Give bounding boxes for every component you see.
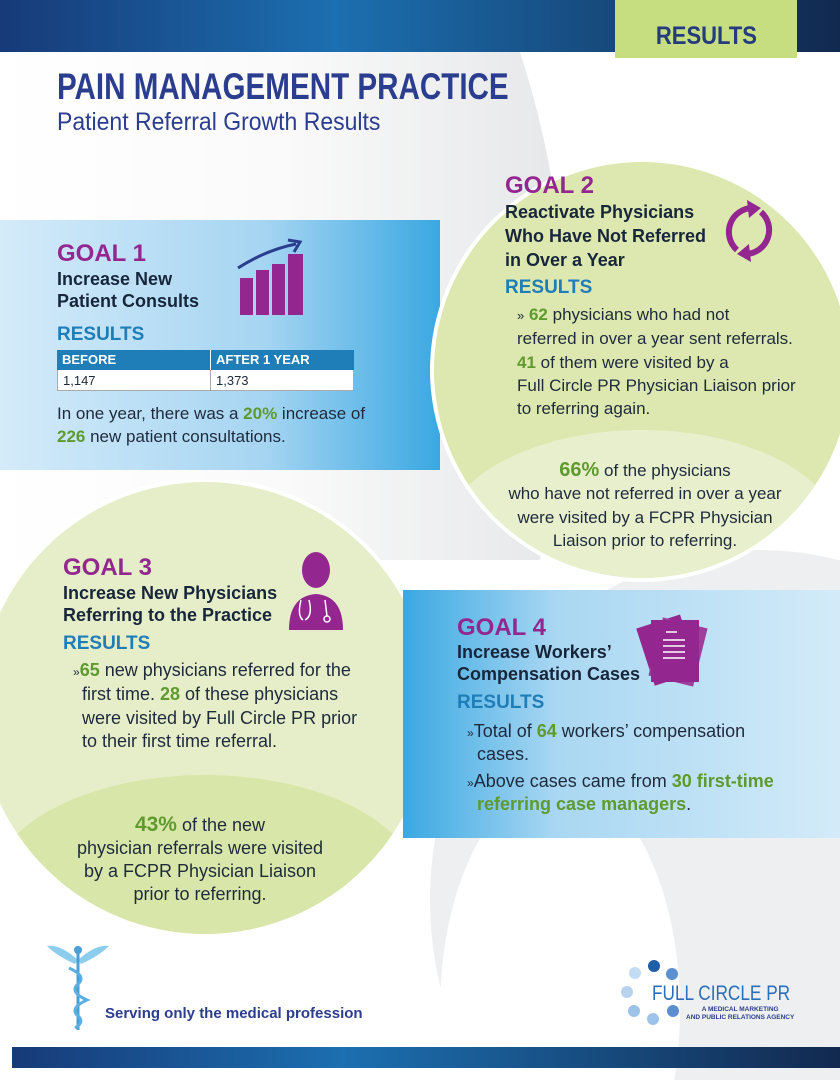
table: 1,147 — [63, 373, 96, 388]
panel: goal 2 circle — [430, 162, 840, 582]
goal 4 heading: Compensation Cases — [457, 664, 640, 684]
goal 3 heading: Increase New Physicians — [63, 583, 277, 603]
goal 3 heading: Referring to the Practice — [63, 605, 272, 625]
table: AFTER 1 YEAR — [216, 352, 310, 367]
table — [57, 350, 354, 391]
icon: documents — [636, 614, 708, 687]
goal 1 heading: Increase New — [57, 269, 172, 289]
goal 2 bullet: to referring again. — [517, 399, 650, 418]
goal 2 bullet — [517, 305, 796, 418]
goal 3 bullet: first time. 28 of these physicians — [82, 684, 338, 704]
panel: goal 1 — [0, 220, 440, 470]
goal 2 stat: were visited by a FCPR Physician — [517, 508, 773, 527]
goal 2 bullet: 41 of them were visited by a — [517, 353, 729, 372]
goal 3 bullet: were visited by Full Circle PR prior — [82, 708, 357, 728]
results tab: RESULTS — [655, 22, 757, 50]
icon: caduceus — [47, 946, 109, 1030]
goal 2 stat: 66% of the physicians — [559, 459, 731, 481]
goal 4 bullets: »Above cases came from 30 first-time — [467, 771, 774, 791]
goal 1 heading — [57, 269, 199, 311]
results label: RESULTS — [505, 277, 592, 298]
logo: full circle pr: FULL CIRCLE PR — [652, 982, 790, 1005]
icon: circular arrows — [726, 200, 772, 262]
goal 2 label: GOAL 2 — [505, 172, 594, 199]
logo: full circle pr: A MEDICAL MARKETING — [702, 1006, 779, 1013]
goal 2 bullet: Full Circle PR Physician Liaison prior — [517, 376, 796, 395]
table: BEFORE — [62, 352, 116, 367]
goal 2 bullet: referred in over a year sent referrals. — [517, 329, 793, 348]
goal 2 stat: Liaison prior to referring. — [553, 531, 737, 550]
goal 4 bullets: cases. — [477, 744, 529, 764]
goal 4 bullets — [467, 721, 774, 814]
icon: doctor — [289, 552, 343, 630]
goal 1 heading: Patient Consults — [57, 291, 199, 311]
goal 2 content — [505, 172, 796, 550]
goal 3 stat: by a FCPR Physician Liaison — [84, 861, 316, 881]
results tab — [615, 0, 797, 58]
goal 1 summary: In one year, there was a 20% increase of 226 new patient consultations. — [57, 404, 365, 446]
goal 3 bullet: »65 new physicians referred for the — [73, 660, 351, 680]
panel: goal 4 — [403, 590, 840, 838]
goal 3 bullet: to their first time referral. — [82, 731, 277, 751]
goal 3 label: GOAL 3 — [63, 554, 152, 581]
goal 3 stat: physician referrals were visited — [77, 838, 323, 858]
goal 3 bullet — [73, 660, 357, 751]
logo: full circle pr — [621, 960, 794, 1025]
goal 3 stat — [77, 813, 323, 904]
goal 3 heading — [63, 583, 277, 625]
goal 2 bullet: » 62 physicians who had not — [517, 305, 729, 324]
tagline: Serving only the medical profession — [105, 1005, 363, 1022]
goal 4 label: GOAL 4 — [457, 614, 546, 641]
goal 2 stat — [508, 459, 782, 550]
goal 2 heading: Reactivate Physicians Who Have Not Referred in Over a Year — [505, 202, 706, 270]
results label: RESULTS — [57, 324, 144, 345]
goal 2 stat: who have not referred in over a year — [508, 484, 782, 503]
panel: goal 3 circle — [0, 482, 403, 934]
icon: bar chart — [237, 238, 303, 315]
table: 1,373 — [216, 373, 249, 388]
results label: RESULTS — [457, 692, 544, 713]
results label: RESULTS — [63, 633, 150, 654]
goal 3 content — [63, 552, 357, 904]
goal 3 stat: 43% of the new — [135, 813, 265, 836]
goal 4 bullets: »Total of 64 workers’ compensation — [467, 721, 745, 741]
logo: full circle pr: AND PUBLIC RELATIONS AGENCY — [686, 1014, 794, 1021]
goal 3 stat: prior to referring. — [133, 884, 267, 904]
title: PAIN MANAGEMENT PRACTICE — [57, 66, 509, 107]
subtitle: Patient Referral Growth Results — [57, 108, 380, 136]
goal 4 heading: Increase Workers’ — [457, 642, 612, 662]
goal 4 bullets: referring case managers. — [477, 794, 691, 814]
goal 1 label: GOAL 1 — [57, 240, 146, 267]
goal 4 heading — [457, 642, 640, 684]
